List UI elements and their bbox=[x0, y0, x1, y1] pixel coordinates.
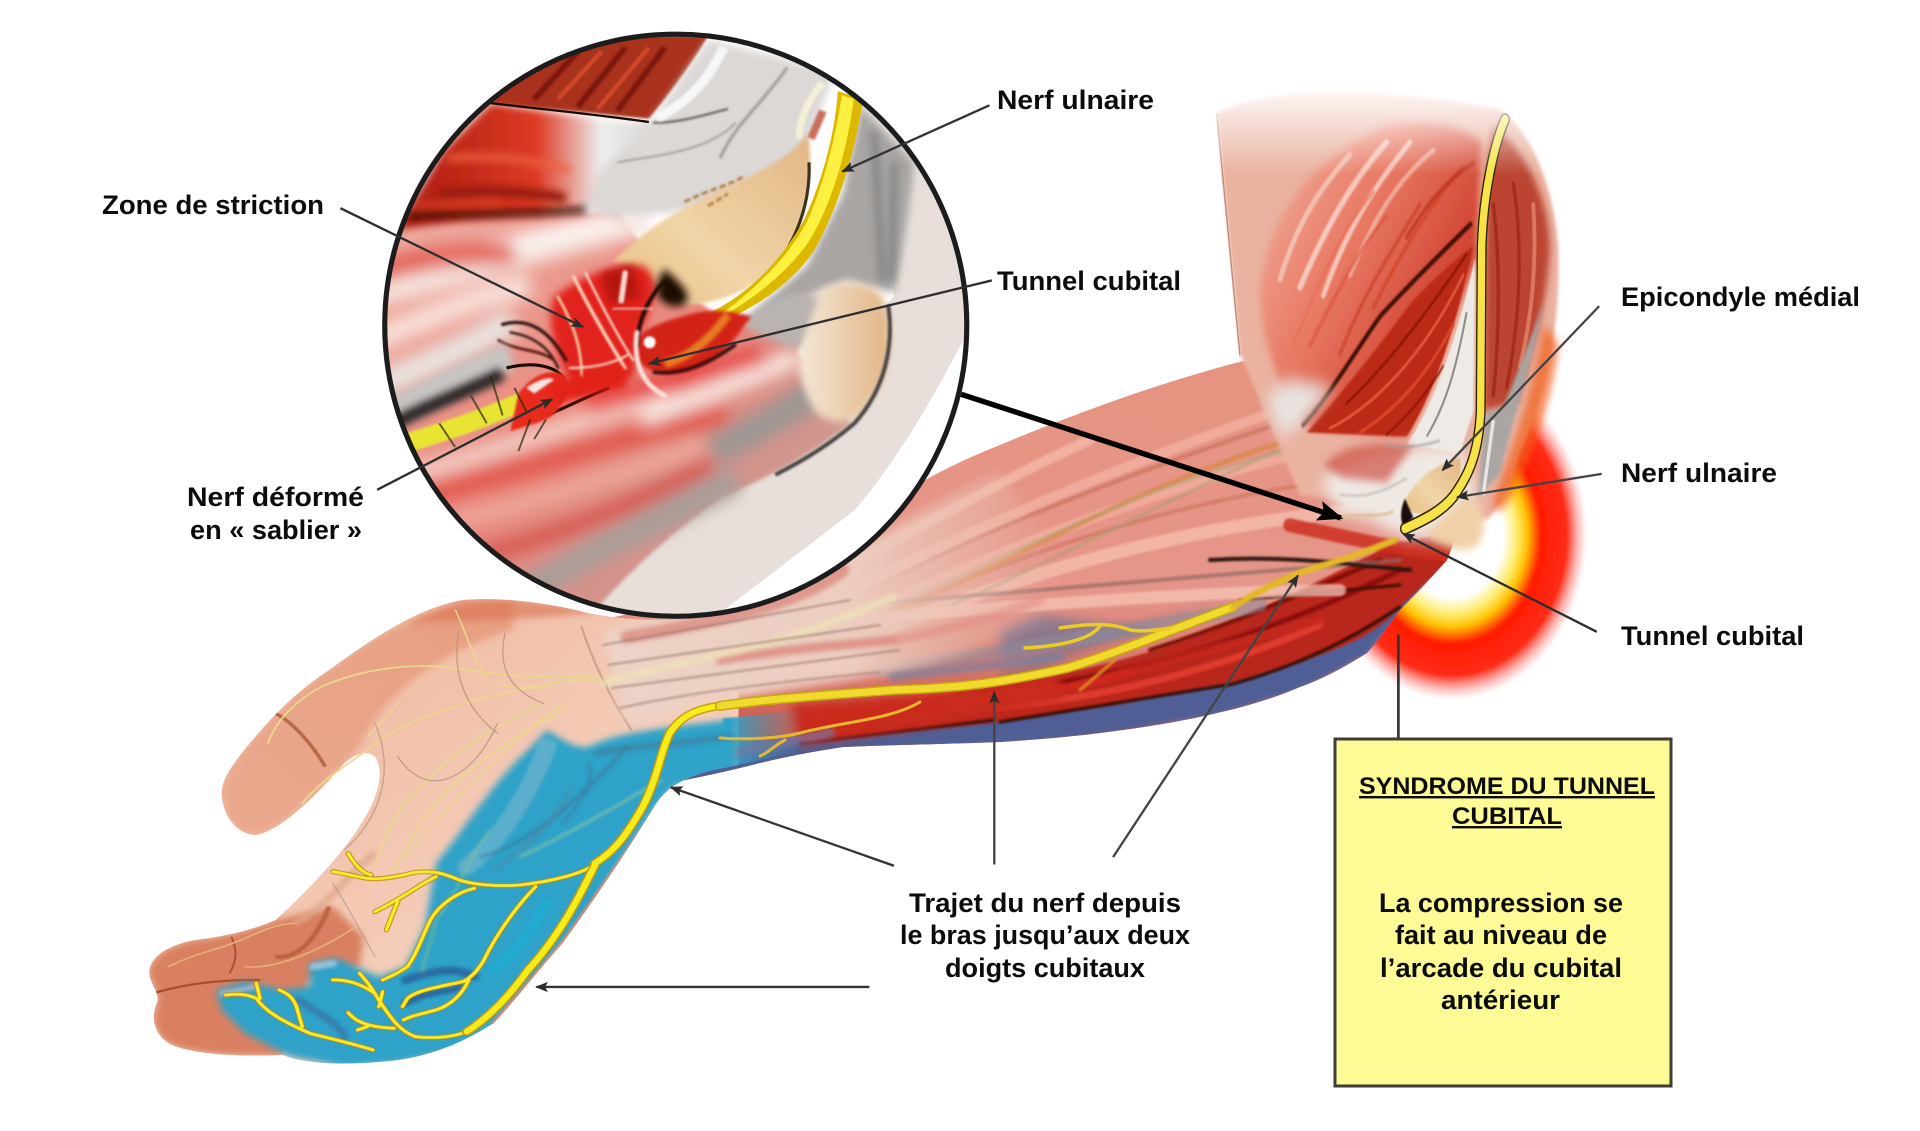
pale nerves and palm creases bbox=[168, 610, 631, 967]
upper arm bbox=[1217, 92, 1559, 550]
arrow: Epicondyle médial bbox=[1442, 306, 1599, 470]
callout body: antérieur bbox=[1441, 985, 1560, 1015]
label: Tunnel cubital elbow: Tunnel cubital bbox=[1621, 621, 1804, 651]
arrow: Tunnel cubital (elbow) bbox=[1403, 534, 1597, 632]
label: nerve path description: le bras jusqu’aux deux bbox=[900, 920, 1190, 950]
forearm nerve side branches bbox=[1025, 624, 1170, 648]
upper arm top fade bbox=[1195, 75, 1575, 175]
bone bbox=[1403, 457, 1461, 514]
connector to box bbox=[1397, 634, 1399, 740]
forearm ulnar nerve bbox=[720, 540, 1395, 756]
label: Nerf déformé en sablier: Nerf déformé bbox=[187, 482, 364, 512]
fibres bbox=[499, 273, 665, 396]
callout heading: CUBITAL bbox=[1452, 803, 1562, 830]
red strip under nerve bbox=[790, 672, 1060, 745]
white tendon bbox=[1407, 258, 1475, 453]
white patch bbox=[1267, 379, 1333, 437]
arrow: Nerf ulnaire (inset) bbox=[842, 105, 989, 171]
streaks bbox=[364, 218, 819, 593]
label: Nerf ulnaire inset: Nerf ulnaire bbox=[997, 85, 1154, 115]
elbow tendons bbox=[1320, 445, 1477, 540]
callout heading bbox=[1359, 773, 1655, 830]
callout box: syndrome du tunnel cubital bbox=[1335, 739, 1671, 1086]
arrow: Nerf déformé bbox=[377, 399, 552, 490]
wrist tendons over forearm bbox=[603, 470, 1060, 752]
label: Epicondyle médial: Epicondyle médial bbox=[1621, 282, 1860, 312]
callout heading: SYNDROME DU TUNNEL bbox=[1359, 773, 1655, 800]
lower red muscles bbox=[800, 530, 1460, 743]
arrow: nerve path to hand bbox=[536, 986, 869, 988]
arrow: Zone de striction bbox=[340, 208, 583, 327]
lower body of forearm bbox=[372, 210, 851, 617]
compressed nerve lower bbox=[396, 356, 510, 409]
tunnel red bbox=[633, 311, 752, 373]
elbow pain glow bbox=[1317, 370, 1587, 700]
upper bone bbox=[613, 135, 810, 305]
gray-white tendon bbox=[570, 40, 835, 218]
callout body: l’arcade du cubital bbox=[1380, 953, 1622, 983]
label: Nerf déformé en sablier: en « sablier » bbox=[190, 515, 362, 545]
label: nerve path description bbox=[900, 888, 1190, 983]
label: Nerf ulnaire elbow: Nerf ulnaire bbox=[1621, 458, 1777, 488]
thumb bbox=[222, 600, 513, 835]
beige background bbox=[600, 105, 964, 614]
leader lines and arrows bbox=[340, 105, 1602, 987]
callout body: fait au niveau de bbox=[1395, 920, 1607, 950]
big arrow: circle to elbow bbox=[961, 394, 1341, 518]
biceps fibres bbox=[1280, 142, 1473, 354]
blue zone bbox=[216, 720, 730, 1067]
red muscle upper bbox=[396, 103, 653, 230]
gray band right of nerve bbox=[736, 107, 914, 328]
blue shadow edge bbox=[684, 570, 1438, 780]
lower biceps red bbox=[1307, 246, 1473, 437]
callout body bbox=[1379, 888, 1623, 1015]
label: Tunnel cubital inset: Tunnel cubital bbox=[997, 266, 1181, 296]
coral outer edge bbox=[494, 807, 658, 1023]
arrow: nerve path to wrist bbox=[671, 787, 894, 866]
hand bbox=[149, 599, 799, 1064]
nerve upper arm bbox=[1405, 119, 1505, 529]
gray blue mid bands bbox=[996, 602, 1222, 676]
label: nerve path description: Trajet du nerf depuis bbox=[909, 888, 1181, 918]
callout body: La compression se bbox=[1379, 888, 1623, 918]
orange rim over glow bbox=[1497, 337, 1553, 507]
magnified circle inset bbox=[364, 34, 973, 617]
label: Zone de striction: Zone de striction bbox=[102, 190, 324, 220]
label: Nerf déformé en sablier bbox=[187, 482, 364, 545]
arrow: Nerf ulnaire (elbow) bbox=[1457, 474, 1602, 497]
arrow: nerve path to upper forearm bbox=[1113, 576, 1298, 857]
label: nerve path description: doigts cubitaux bbox=[945, 953, 1145, 983]
upper muscle fibres bbox=[874, 410, 1452, 678]
upper-left dark muscle bbox=[491, 36, 708, 119]
strangulation zone bbox=[551, 265, 654, 396]
main illustration: arm and hand bbox=[130, 75, 1587, 1090]
lower bone bbox=[798, 283, 889, 422]
forearm bbox=[614, 361, 1454, 780]
fingers bbox=[149, 907, 363, 1056]
nerve yellow bbox=[706, 91, 863, 328]
arrow: nerve path to forearm bbox=[993, 692, 995, 864]
ulnar nerve branches in hand bbox=[226, 705, 730, 1050]
blue shading bbox=[222, 737, 730, 1037]
arrow: Tunnel cubital (inset) bbox=[649, 280, 992, 364]
